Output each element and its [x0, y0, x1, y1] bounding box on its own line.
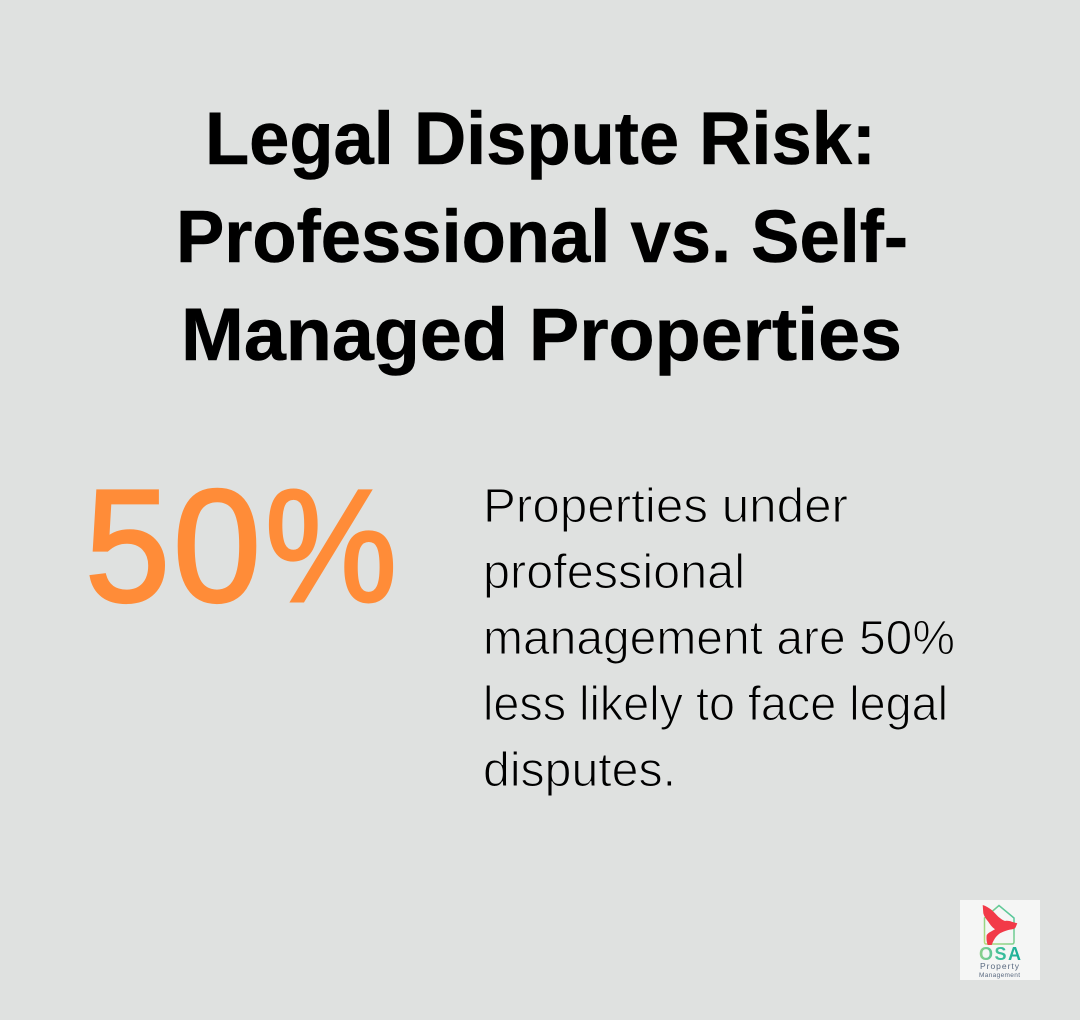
title	[176, 97, 908, 376]
description text: less likely to face legal	[483, 678, 948, 731]
description text	[483, 480, 955, 797]
description text: disputes.	[483, 744, 676, 797]
title: Legal Dispute Risk:	[205, 97, 876, 180]
description text: management are 50%	[483, 612, 955, 665]
big statistic: 50%: 5	[85, 456, 170, 635]
logo: OSA Property Management	[960, 900, 1040, 980]
logo: OSA Property Management: Property	[980, 961, 1020, 971]
icon: red bird	[983, 905, 1017, 945]
logo wordmark: OSA	[979, 944, 1021, 964]
big statistic: 50%	[85, 456, 397, 635]
title: Professional vs. Self-	[176, 195, 908, 278]
big statistic: 50%: %	[265, 456, 397, 635]
description text: professional	[483, 546, 745, 599]
big statistic: 50%: 0	[173, 456, 261, 635]
icon: house outline	[984, 906, 1014, 944]
logo: OSA Property Management: Management	[979, 972, 1020, 979]
title: Managed Properties	[181, 293, 902, 376]
description text: Properties under	[483, 480, 848, 533]
